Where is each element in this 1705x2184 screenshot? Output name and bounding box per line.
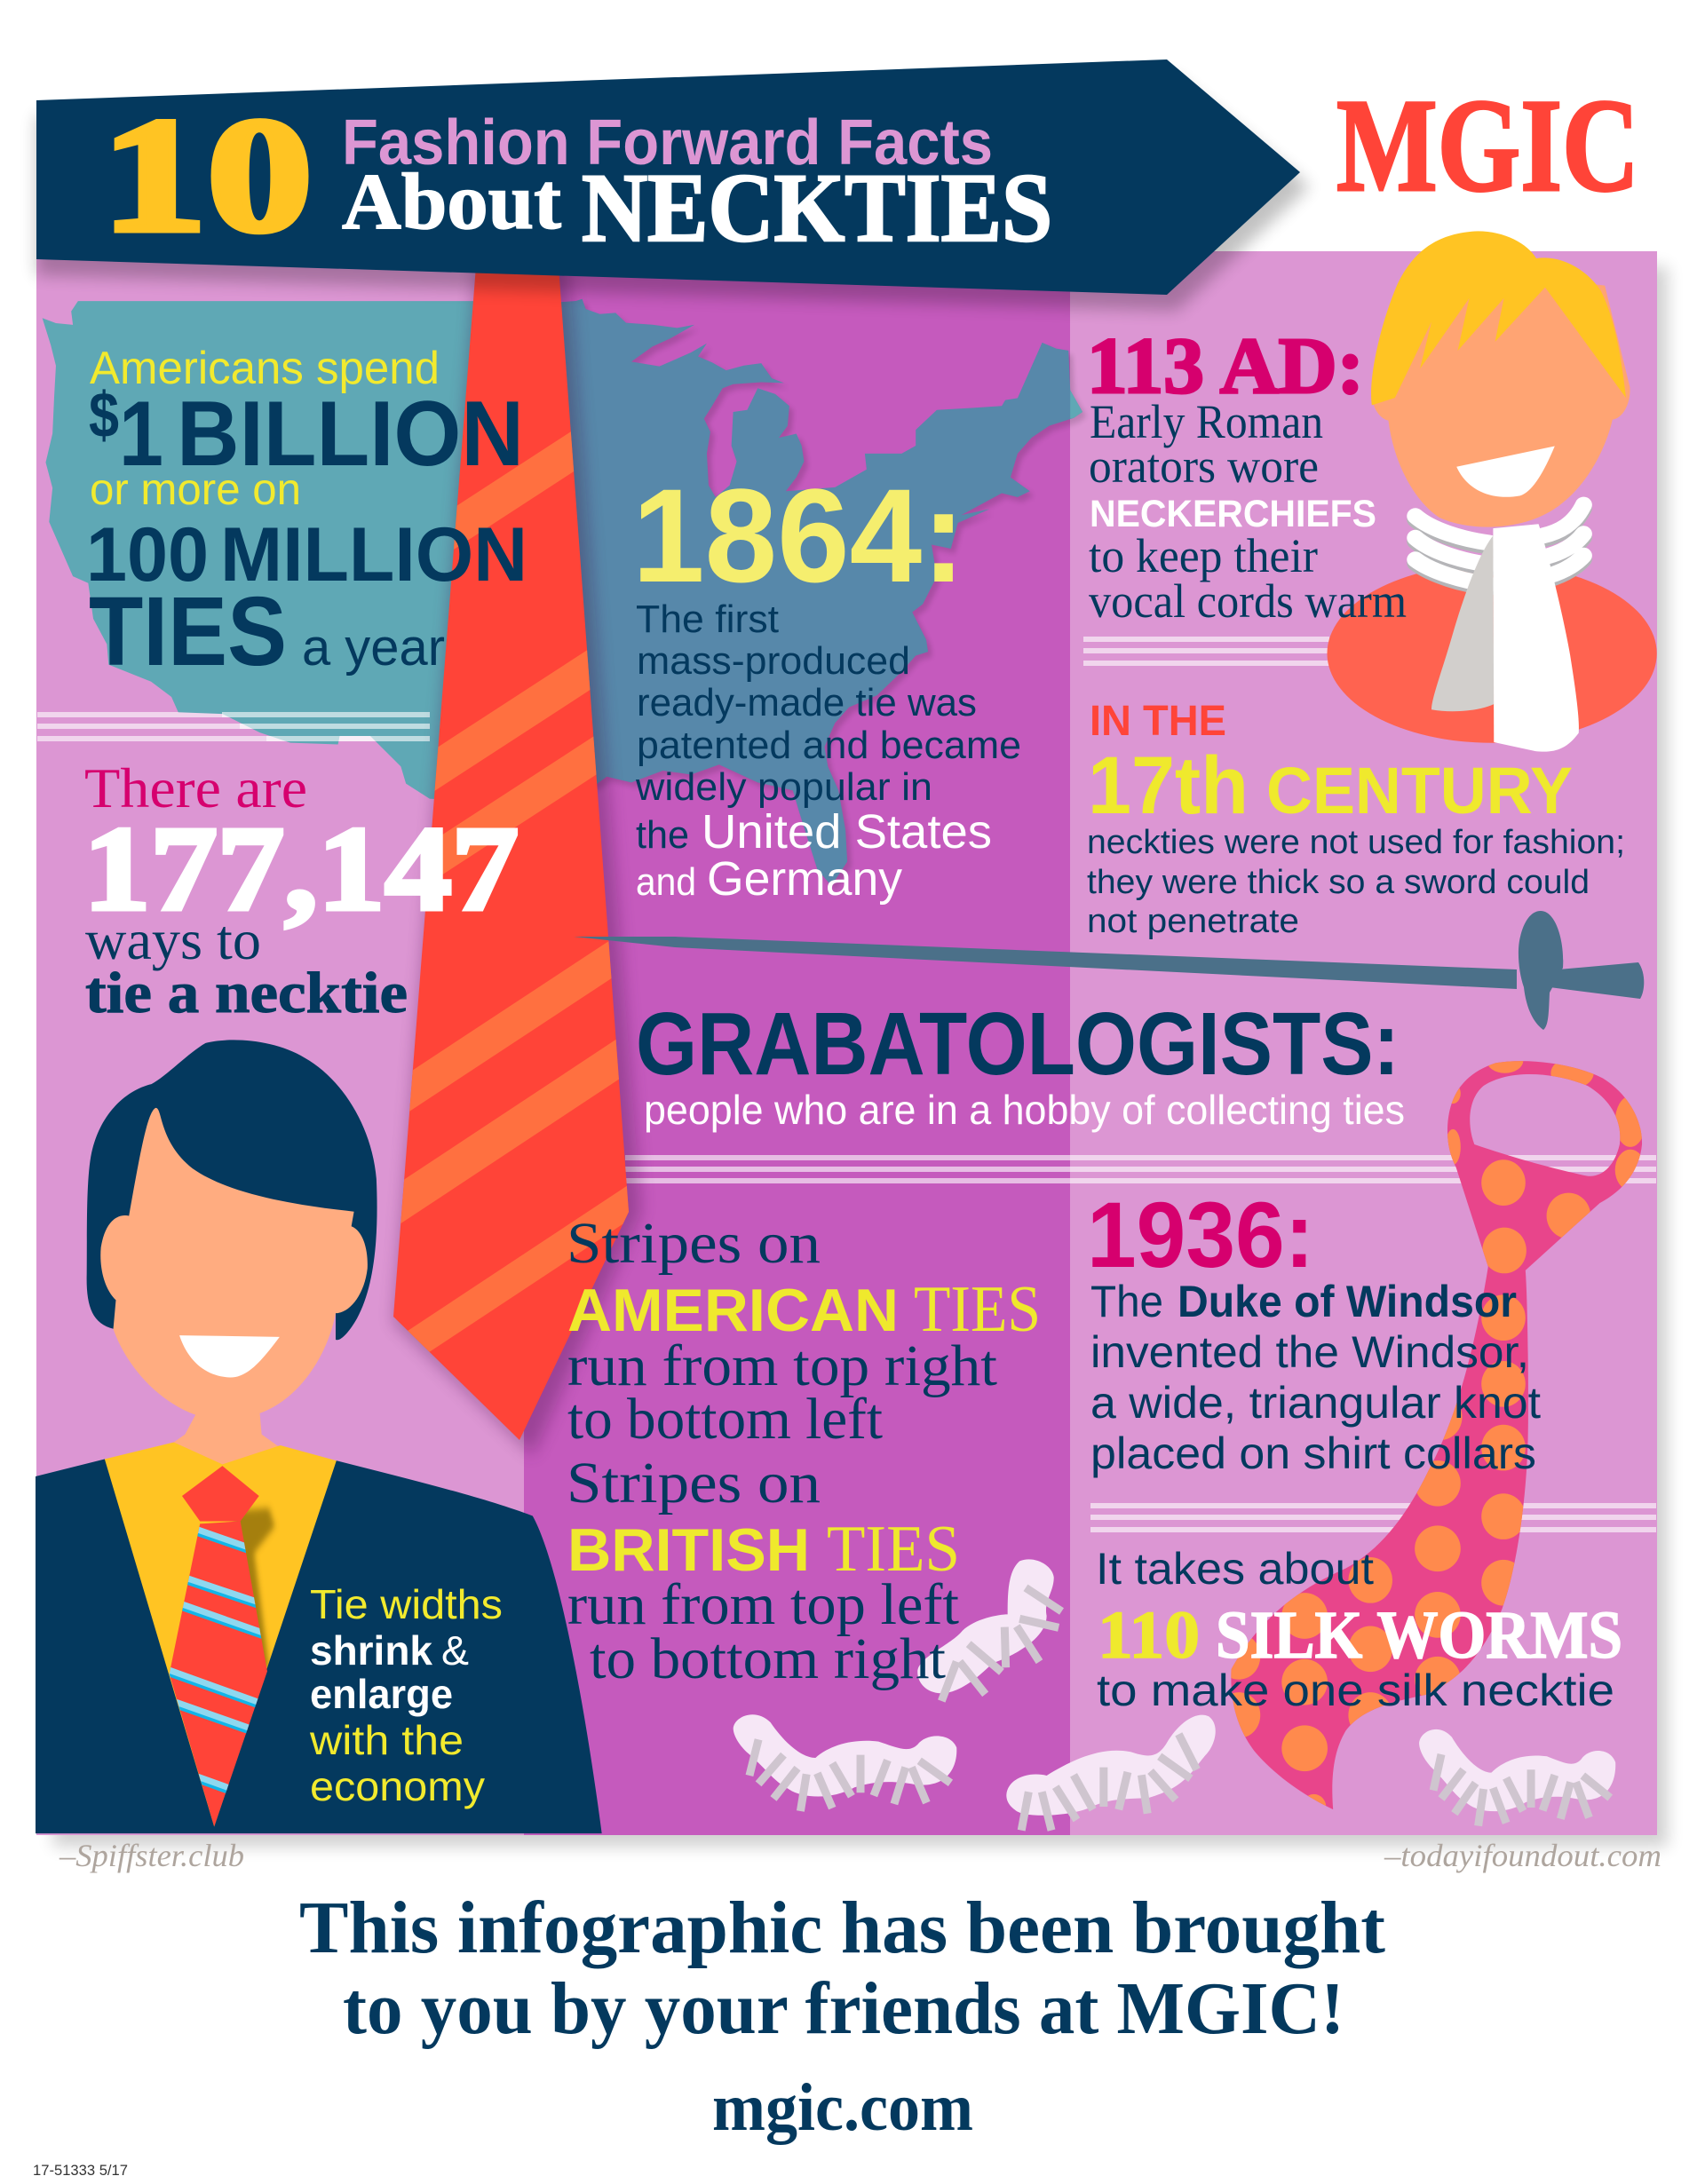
fact: 177,147 ways: tie a necktie [85,961,408,1025]
fact: 1864: patented and became [637,724,1021,767]
fact: tie widths: shrink [310,1627,432,1674]
fact: 1864: mass-produced [637,639,910,683]
face [1372,267,1630,527]
MGIC logo: MGIC [1336,72,1639,219]
fact: 1936: placed on shirt collars [1090,1428,1536,1478]
worm: top right of centre [917,1559,1062,1701]
fact: one billion dollars: or more on [90,464,301,514]
fact: tie widths: economy [310,1763,485,1809]
icon: sword [574,911,1644,1030]
fact: 1864: Germany [707,852,902,906]
title line one: Fashion Forward Facts [342,107,993,178]
big tie shadow [393,266,641,1456]
fact: stripes: AMERICAN [567,1277,899,1344]
fact: 1864: ready-made tie was [637,681,977,724]
fact: stripes: TIES [914,1273,1041,1346]
shirt collar [105,1442,337,1826]
fact: 1864: The first [636,597,779,641]
fact: 1864: United States [702,805,992,859]
banner [36,59,1300,295]
fact: 1936: The [1090,1277,1163,1326]
small striped tie [164,1521,267,1826]
shoulders [1327,564,1657,743]
fact: 1936: invented the Windsor, [1090,1327,1529,1377]
closing message: to you by your friends at MGIC! [343,1967,1344,2050]
fact: grabatologists [636,994,1405,1133]
fact: 113 AD: to keep their [1089,529,1318,582]
fact: stripes: TIES [827,1513,960,1586]
fact: 1936: a wide, triangular knot [1090,1378,1541,1428]
worm: bottom middle [1006,1715,1216,1831]
NECKTIES: NECKTIES [582,154,1052,262]
fact: stripes: to bottom left [567,1387,883,1452]
source: Spiffster: –Spiffster.club [59,1838,244,1873]
fact: stripes [567,1211,1041,1691]
job code: 17-51333 5/17 [33,2162,128,2179]
fact: 17th century: not penetrate [1087,903,1299,940]
fact: stripes: run from top left [567,1572,959,1637]
divider lines: right upper [1083,637,1329,666]
fact: 17th century [1087,698,1625,940]
fact: 1864: 1864: [632,461,965,610]
panel: purple centre column [524,251,1070,1835]
fact: 17th century: neckties were not used for fashion; [1087,824,1625,861]
fact: 1864: and [636,860,696,904]
fact: 1936 [1087,1183,1541,1478]
hair [87,1040,377,1340]
fact: tie widths: & [441,1627,469,1674]
suit jacket [36,1459,602,1833]
fact: grabatologists: GRABATOLOGISTS: [636,994,1400,1094]
face [100,1108,368,1466]
fact: stripes: to bottom right [590,1626,946,1691]
fact: one billion dollars: Americans spend [90,343,440,394]
fact: stripes: BRITISH [567,1516,810,1584]
fact: one billion dollars: 1 [119,383,163,486]
fact: 1936: Duke of Windsor [1178,1277,1517,1326]
fact: one billion dollars [86,343,527,686]
fact: 177,147 ways: There are [84,756,307,819]
source: todayifoundout: –todayifoundout.com [1384,1838,1661,1873]
fact: 177,147 ways: ways to [85,908,261,971]
fact: 1864: the [636,813,689,857]
smile [1456,446,1555,497]
divider lines: left [37,712,430,741]
worm: bottom centre left [734,1714,956,1811]
smile [179,1335,280,1378]
panel: pink background [36,251,1657,1835]
fact: one billion dollars: MILLION [220,512,527,597]
fact: one billion dollars: $ [89,380,119,451]
scarf rings [1416,505,1583,588]
divider lines over map [222,712,430,741]
divider lines: centre [625,1155,1656,1183]
fact: 113 AD: Early Roman [1090,395,1323,448]
fact: 113 AD: 113 AD: [1087,322,1364,410]
banner shadow [36,75,1310,311]
fact: 17th century: CENTURY [1266,754,1573,827]
fact: stripes: Stripes on [567,1451,821,1515]
fact: one billion dollars: TIES [89,577,287,686]
fact: 17th century: they were thick so a sword could [1087,864,1590,901]
icon: polka dot necktie [1217,1048,1649,1822]
fact: 113 AD: NECKERCHIEFS [1090,493,1376,535]
fact: tie widths: with the [309,1717,464,1763]
illustration: man with tie [36,1040,602,1833]
tie knot [182,1466,259,1521]
fact: one billion dollars: BILLION [177,383,524,486]
fact: 1936: 1936: [1087,1183,1314,1287]
map: western United States [43,301,478,801]
fact: 113 AD: vocal cords warm [1089,574,1407,628]
fact: 113 AD [1087,322,1407,628]
big striped necktie [393,273,629,1440]
fact: silk worms [1096,1544,1622,1715]
fact: silk worms: It takes about [1096,1544,1374,1594]
title [101,84,1052,265]
map: eastern United States [559,299,1087,890]
closing message: This infographic has been brought [299,1887,1385,1969]
fact: 1864: widely popular in [635,765,932,809]
fact: 177,147 ways [83,756,519,1025]
fact: grabatologists: people who are in a hobby of collecting ties [644,1087,1405,1133]
title line two: About [342,158,561,246]
fact: tie widths: Tie widths [310,1581,503,1627]
worm: bottom right [1419,1729,1615,1826]
website: mgic.com [712,2070,973,2145]
fact: stripes: Stripes on [567,1211,821,1276]
number 10: 10 [101,84,313,265]
divider lines: right lower [1090,1503,1656,1532]
fact: silk worms: 110 [1098,1598,1200,1673]
scarf [1431,535,1494,711]
fact: 17th century: IN THE [1090,698,1226,745]
fact: 177,147 ways: 177,147 [83,803,519,936]
fact: tie widths: enlarge [310,1671,453,1717]
fact: 113 AD: orators wore [1089,439,1319,493]
fact: silk worms: to make one silk necktie [1097,1666,1614,1715]
illustration: Roman orator with scarf [1327,231,1657,752]
fact: 17th century: 17th [1088,740,1249,831]
fact: silk worms: SILK WORMS [1216,1598,1622,1673]
tie shadow on shirt [234,1508,274,1674]
panel shadow [53,266,1668,1847]
closing message [299,1887,1385,2050]
fact: stripes: run from top right [567,1333,997,1398]
fact: one billion dollars: 100 [86,512,209,597]
fact: one billion dollars: a year [302,619,445,677]
hair [1371,231,1626,405]
fact: tie widths [309,1581,503,1809]
fact: 1864 [632,461,1021,906]
